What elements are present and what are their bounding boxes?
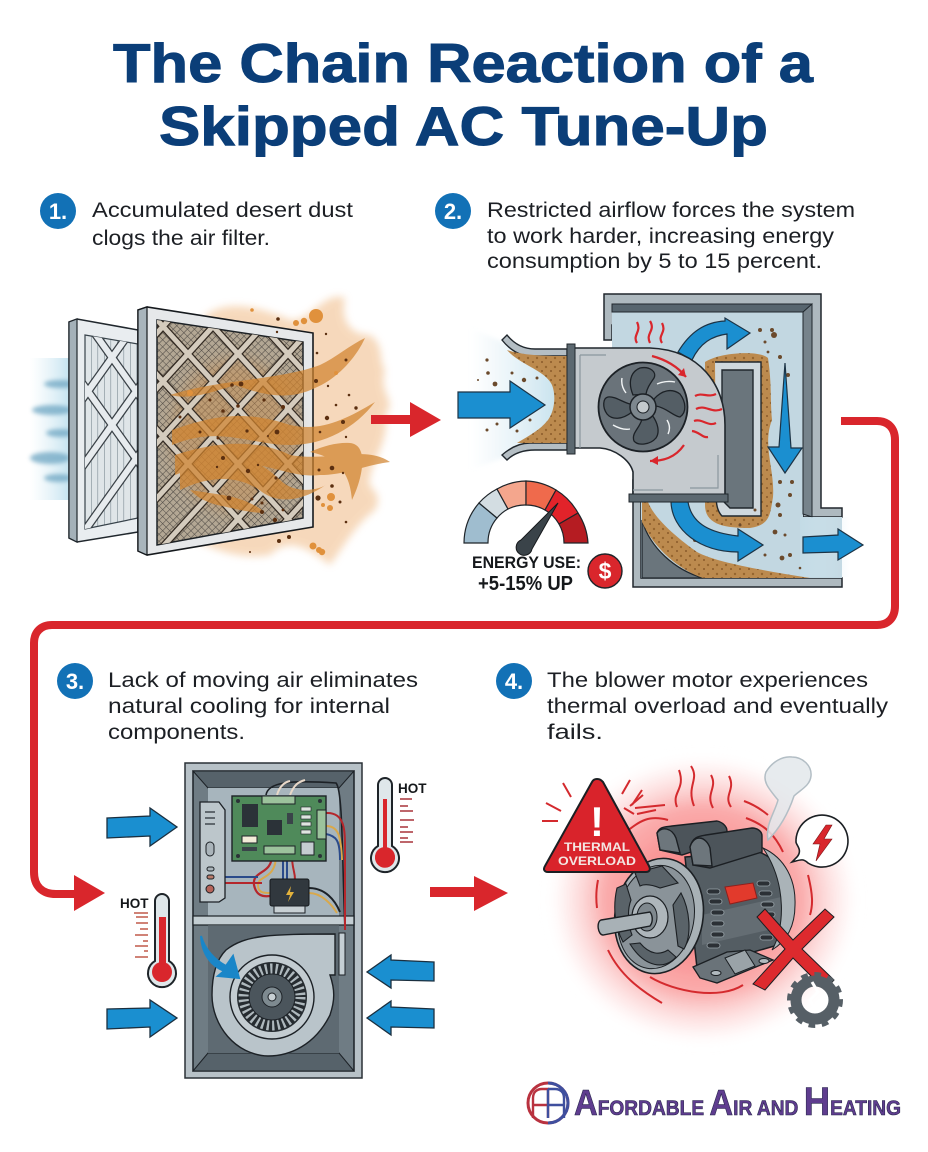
step 3 heading: Lack of moving air eliminates — [108, 669, 418, 692]
thermometer: right: HOT — [398, 781, 427, 796]
step 2 heading — [435, 193, 855, 273]
dust clumps — [187, 308, 338, 555]
energy gauge — [464, 481, 622, 595]
arrow: step 3 to step 4 — [430, 876, 508, 911]
wiring — [225, 780, 345, 930]
gauge needle — [516, 503, 558, 555]
casing — [604, 294, 842, 587]
step 1 heading — [40, 193, 353, 250]
thermometer: left — [120, 894, 176, 987]
heat arcs — [596, 766, 812, 1003]
motor rear bell — [763, 848, 795, 950]
clean airflow entering filter — [30, 358, 76, 500]
gauge label — [472, 553, 581, 595]
icon: speech bubble lightning — [792, 815, 848, 867]
heat marks — [636, 321, 722, 465]
dust streams — [170, 338, 390, 513]
step 4 heading: thermal overload and eventually — [547, 695, 889, 718]
warning triangle: ! — [590, 798, 604, 845]
step 4 heading: 4. — [505, 669, 523, 694]
gauge label: +5-15% UP — [478, 573, 573, 595]
control box — [200, 802, 225, 902]
step 4 heading — [496, 663, 889, 744]
arrow: inlet air — [458, 381, 545, 428]
airflow outlet haze — [800, 517, 850, 577]
motor body — [685, 851, 793, 968]
clogged filter — [137, 306, 314, 556]
inlet air haze — [470, 328, 570, 470]
title: The Chain Reaction of a — [113, 32, 813, 94]
heat glow — [543, 750, 863, 1050]
step 3 heading — [57, 663, 418, 744]
step 2 heading: Restricted airflow forces the system — [487, 199, 855, 222]
step 4 heading: fails. — [547, 721, 603, 744]
step 2 heading: consumption by 5 to 15 percent. — [487, 250, 822, 273]
arrow: blower inlet — [201, 936, 239, 978]
illustration: furnace cabinet — [185, 763, 362, 1078]
title: Skipped AC Tune-Up — [159, 95, 768, 157]
arrow: downward — [768, 363, 802, 473]
icon: dollar: $ — [599, 558, 612, 584]
logo emblem — [528, 1083, 568, 1123]
step 1 heading: Accumulated desert dust — [92, 199, 353, 222]
dust cloud — [195, 297, 390, 565]
thermometer: right — [371, 778, 427, 872]
motor vents — [707, 881, 775, 948]
logo — [528, 1080, 901, 1124]
motor — [598, 821, 795, 983]
warning triangle: OVERLOAD — [558, 854, 636, 868]
illustration: clogged air filter — [28, 292, 394, 567]
blower wheel — [212, 933, 345, 1056]
smoke — [765, 757, 811, 840]
motor capacitors — [657, 821, 762, 868]
circuit board — [232, 796, 326, 861]
warning triangle — [542, 779, 656, 872]
arrow: step 1 to step 2 — [371, 402, 441, 437]
warning triangle: THERMAL — [564, 840, 630, 854]
red X — [753, 909, 834, 990]
step 4 heading: The blower motor experiences — [547, 669, 868, 692]
illustration: restricted airflow blower — [458, 294, 863, 595]
connector: step 2 to step 3 — [34, 421, 895, 911]
motor end bell — [598, 851, 712, 981]
inner baffle with dust — [705, 353, 773, 528]
title — [113, 32, 813, 157]
logo wordmark: AFORDABLE AIR AND HEATING — [574, 1080, 901, 1124]
step 1 heading: 1. — [49, 199, 67, 224]
arrow: exit — [803, 529, 863, 560]
icon: dollar — [588, 554, 622, 588]
air arrows around furnace — [107, 808, 434, 1037]
clean filter — [68, 318, 138, 543]
step 2 heading: to work harder, increasing energy — [487, 225, 835, 248]
step 1 heading: clogs the air filter. — [92, 227, 270, 250]
icon: cracked gear — [790, 975, 840, 1025]
step 2 heading: 2. — [444, 199, 462, 224]
transformer — [270, 879, 309, 913]
step 3 heading: natural cooling for internal — [108, 695, 390, 718]
step 3 heading: 3. — [66, 669, 84, 694]
gauge label: ENERGY USE: — [472, 553, 581, 572]
blower housing — [567, 344, 728, 502]
illustration: failing blower motor — [542, 750, 863, 1050]
thermometer: left: HOT — [120, 896, 149, 911]
dust particles — [477, 328, 801, 569]
fan — [598, 362, 688, 452]
motor label — [725, 883, 757, 904]
motor feet — [693, 950, 773, 983]
dust particles — [178, 317, 358, 553]
arrow: top outflow — [678, 318, 750, 360]
arrow: lower curved — [671, 502, 763, 561]
inlet duct — [502, 335, 567, 460]
lower duct dust deposit — [642, 502, 810, 578]
step 3 heading: components. — [108, 721, 245, 744]
